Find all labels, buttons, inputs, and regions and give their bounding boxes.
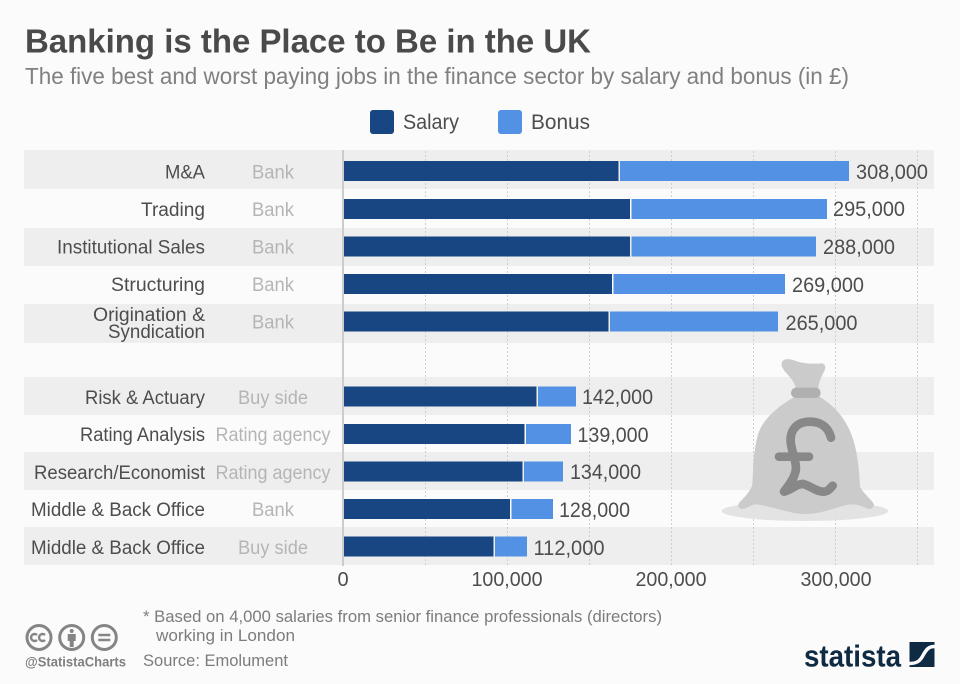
- row: M&A Bank: Bank: [252, 162, 294, 184]
- legend: Salary: [403, 110, 459, 134]
- row: Structuring Bank: [111, 273, 864, 297]
- row: M&A Bank: 308,000: [856, 160, 928, 184]
- icon: money bag with pound sign: [722, 359, 888, 521]
- row: Trading Bank: 295,000: [833, 197, 905, 221]
- row: Rating Analysis Rating agency: [80, 423, 649, 447]
- row: Structuring Bank: Bank: [252, 275, 294, 296]
- subtitle: The five best and worst paying jobs in the finance sector by salary and bonus (in £): [25, 63, 849, 89]
- row: Research/Economist Rating agency: 134,000: [570, 460, 641, 484]
- legend: Bonus: [531, 110, 590, 134]
- row: Middle & Back Office Bank: Middle & Back Office: [31, 500, 205, 521]
- row: Origination & Syndication Bank: [93, 305, 858, 343]
- row: Rating Analysis Rating agency: 139,000: [578, 423, 649, 447]
- row: Middle & Back Office Buy side: 112,000: [534, 536, 605, 560]
- row: Institutional Sales Bank: Institutional Sales: [57, 238, 205, 258]
- row: Trading Bank: [141, 197, 905, 221]
- footnote: [143, 607, 662, 645]
- x axis labels: [337, 569, 872, 591]
- row: Research/Economist Rating agency: [34, 460, 641, 484]
- row: Middle & Back Office Buy side: Buy side: [238, 538, 308, 559]
- row: Middle & Back Office Buy side: Middle & Back Office: [31, 538, 205, 559]
- row: M&A Bank: [165, 160, 928, 184]
- row: Rating Analysis Rating agency: Rating agency: [216, 425, 331, 446]
- x axis labels: 0: [337, 569, 349, 591]
- source: Source: Emolument: [143, 651, 288, 670]
- row: Institutional Sales Bank: Bank: [252, 238, 294, 258]
- statista logo: statista: [804, 638, 902, 674]
- row: Institutional Sales Bank: [57, 235, 895, 259]
- row: Risk & Actuary Buy side: 142,000: [582, 385, 653, 409]
- row: Middle & Back Office Bank: Bank: [252, 500, 294, 521]
- footnote: working in London: [155, 626, 295, 645]
- row: Origination & Syndication Bank: Bank: [252, 312, 294, 334]
- row: Origination & Syndication Bank: 265,000: [786, 311, 858, 335]
- row: Trading Bank: Bank: [252, 200, 294, 221]
- row: Institutional Sales Bank: 288,000: [823, 235, 895, 259]
- row: M&A Bank: M&A: [165, 162, 205, 184]
- row: Research/Economist Rating agency: Research/Economist: [34, 463, 206, 484]
- row: Origination & Syndication Bank: Origination &: [93, 305, 205, 326]
- row: Rating Analysis Rating agency: Rating Analysis: [80, 425, 205, 446]
- row: Structuring Bank: Structuring: [111, 275, 205, 296]
- row: Risk & Actuary Buy side: Buy side: [238, 388, 308, 409]
- row: Structuring Bank: 269,000: [792, 273, 864, 297]
- row: Risk & Actuary Buy side: Risk & Actuary: [85, 388, 205, 409]
- x axis labels: 100,000: [472, 569, 542, 591]
- x axis labels: 200,000: [636, 569, 706, 591]
- row: Trading Bank: Trading: [141, 200, 205, 221]
- row: Research/Economist Rating agency: Rating agency: [216, 463, 331, 484]
- icon: creative commons licence badges: [27, 626, 116, 650]
- row: Middle & Back Office Bank: [31, 498, 630, 522]
- x axis labels: 300,000: [800, 569, 872, 591]
- row: Middle & Back Office Buy side: [31, 536, 605, 560]
- row: Origination & Syndication Bank: Syndication: [108, 322, 205, 343]
- row: Middle & Back Office Bank: 128,000: [559, 498, 630, 522]
- row: Risk & Actuary Buy side: [85, 385, 653, 409]
- social handle: @StatistaCharts: [25, 655, 126, 670]
- legend: [370, 110, 590, 134]
- title: Banking is the Place to Be in the UK: [25, 24, 591, 61]
- footnote: * Based on 4,000 salaries from senior finance professionals (directors): [143, 607, 662, 626]
